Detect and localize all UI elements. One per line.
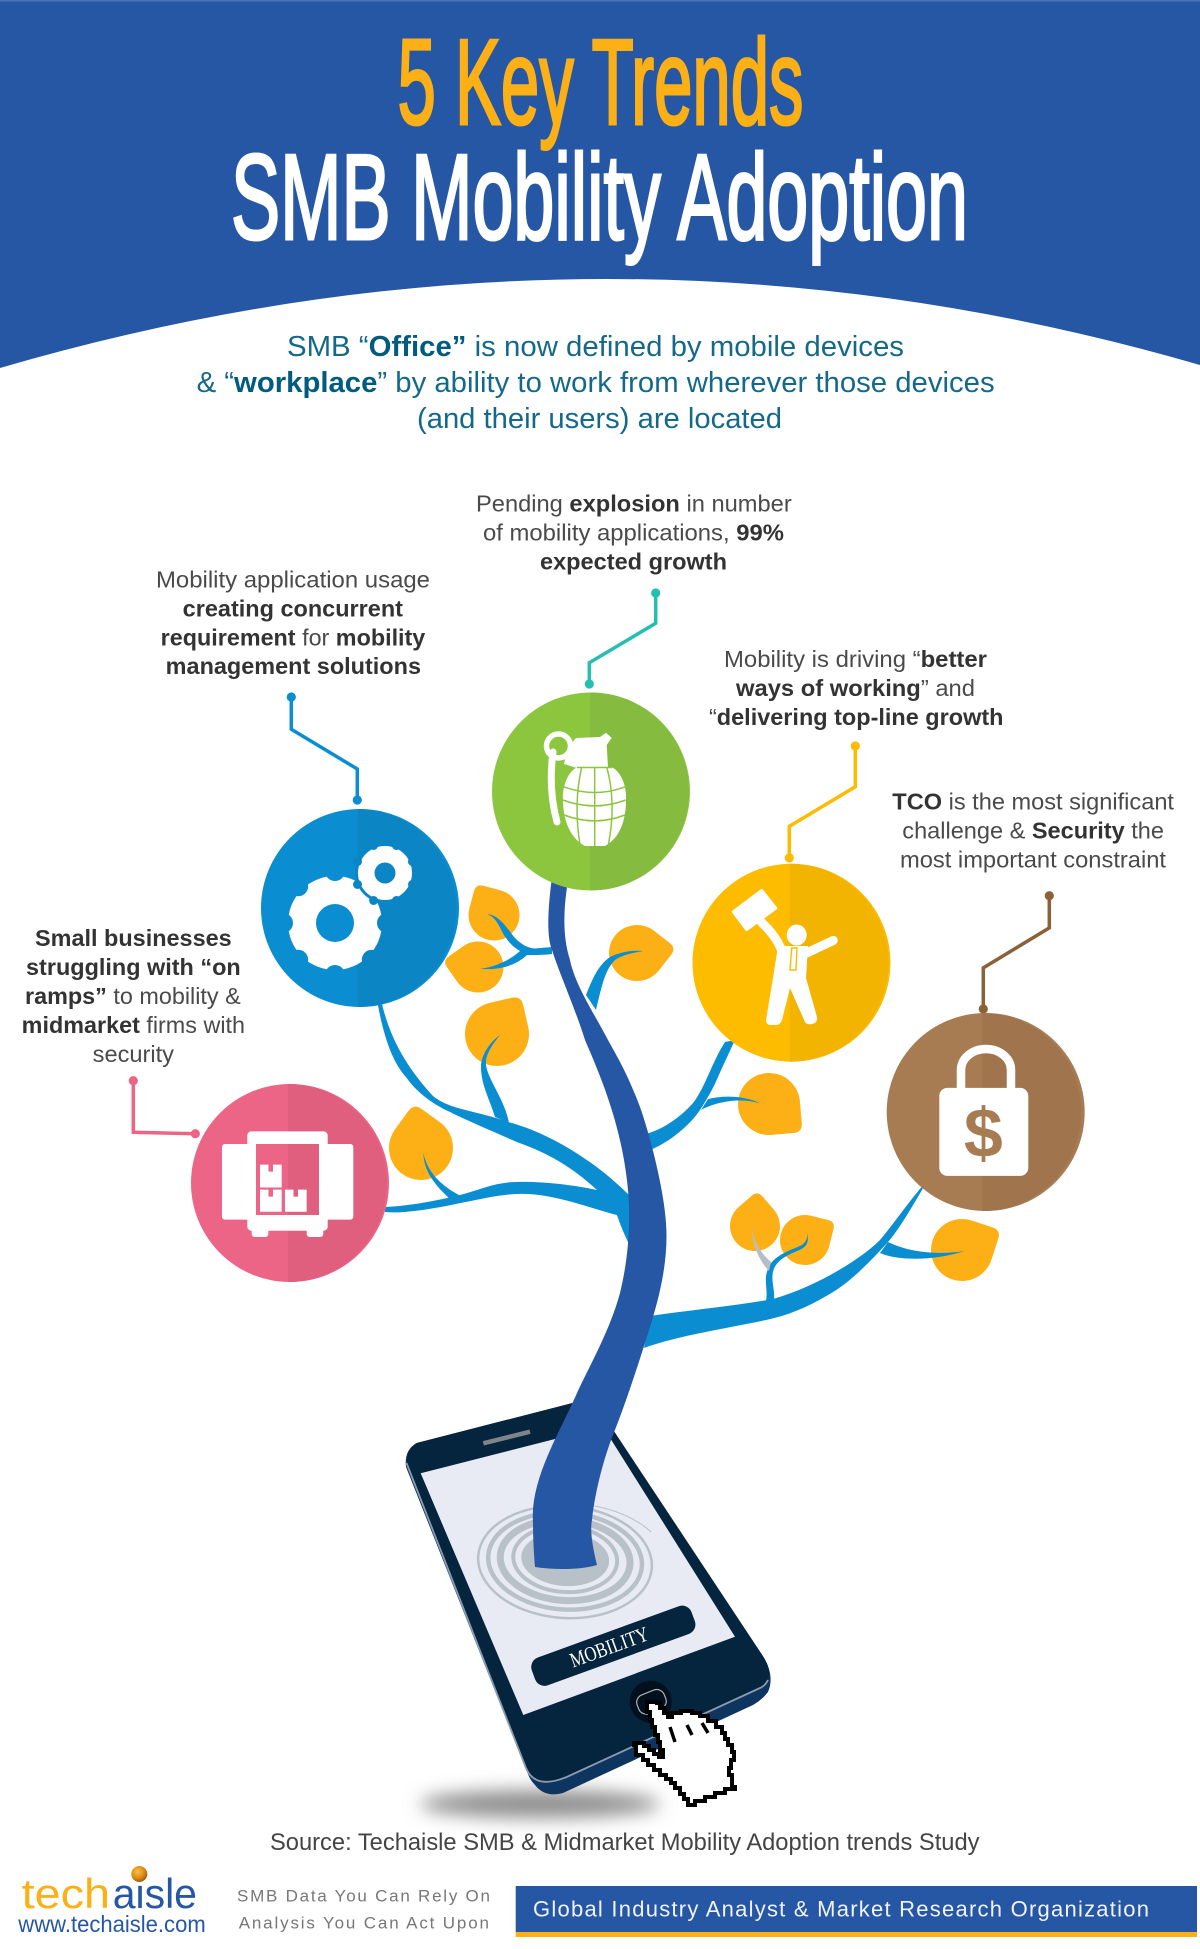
home button bbox=[630, 1681, 672, 1723]
logo: aisle bbox=[113, 1870, 197, 1917]
callout: small businesses: ramps” to mobility & bbox=[25, 983, 241, 1009]
phone bbox=[406, 1398, 771, 1794]
tagline bbox=[237, 1887, 490, 1932]
callout: application explosion bbox=[476, 491, 792, 574]
logo: www.techaisle.com bbox=[17, 1911, 206, 1937]
logo bbox=[17, 1866, 206, 1937]
source line: Source: Techaisle SMB & Midmarket Mobility Adoption trends Study bbox=[270, 1829, 980, 1856]
tagline: Analysis You Can Act Upon bbox=[239, 1913, 489, 1932]
subheading: & “workplace” by ability to work from wherever those devices bbox=[197, 367, 995, 399]
icon: businessman with briefcase bbox=[733, 890, 833, 1025]
callout: application explosion: expected growth bbox=[540, 548, 727, 574]
grey twig bbox=[752, 1228, 771, 1271]
icon: padlock bbox=[939, 1049, 1028, 1176]
tagline: SMB Data You Can Rely On bbox=[237, 1887, 490, 1906]
connector: brown bbox=[979, 891, 1054, 1014]
callout: management solutions: management solutions bbox=[166, 653, 421, 679]
footer bar bbox=[516, 1886, 1197, 1937]
footer bar: Global Industry Analyst & Market Research Organization bbox=[533, 1897, 1149, 1922]
callout: small businesses: Small businesses bbox=[35, 925, 232, 951]
right branches bbox=[645, 1040, 735, 1150]
icon: small gear bbox=[353, 841, 417, 905]
callout: application explosion: of mobility applications, 99% bbox=[483, 520, 784, 546]
connector: pink bbox=[129, 1076, 200, 1138]
circle: grenade icon bbox=[492, 692, 690, 890]
circle: businessman icon bbox=[692, 864, 890, 1062]
subheading bbox=[197, 331, 995, 435]
header banner bbox=[0, 0, 1200, 368]
phone shadow bbox=[420, 1790, 660, 1818]
mobility button bbox=[528, 1603, 698, 1689]
cursor hand bbox=[634, 1702, 735, 1805]
circle: storage icon bbox=[191, 1084, 389, 1282]
icon: large gear bbox=[273, 861, 397, 985]
mobility button: MOBILITY bbox=[567, 1622, 652, 1672]
left branches bbox=[377, 1000, 640, 1250]
callout: better ways of working bbox=[709, 646, 1004, 730]
icon: grenade bbox=[546, 733, 626, 846]
callout: TCO and security: TCO is the most significant bbox=[892, 788, 1175, 814]
callout: small businesses bbox=[22, 925, 245, 1067]
callout: TCO and security: most important constraint bbox=[900, 846, 1167, 872]
icon: storage cabinet bbox=[222, 1131, 353, 1237]
title bbox=[231, 14, 968, 265]
callout: management solutions: creating concurrent bbox=[183, 596, 403, 622]
callout: management solutions: requirement for mobility bbox=[161, 624, 426, 650]
callout: better ways of working: “delivering top-line growth bbox=[709, 704, 1004, 730]
callout: small businesses: struggling with “on bbox=[26, 954, 241, 980]
logo: tech bbox=[22, 1870, 110, 1917]
callout: TCO and security: challenge & Security the bbox=[902, 817, 1164, 843]
ripples bbox=[474, 1498, 656, 1624]
callout: better ways of working: ways of working ” and bbox=[735, 675, 975, 701]
callout: better ways of working: Mobility is driving “ better bbox=[724, 646, 987, 672]
phone screen bbox=[421, 1427, 735, 1715]
title line 1: 5 Key Trends bbox=[398, 14, 804, 150]
circle: lock icon bbox=[887, 1013, 1085, 1211]
callout: small businesses: security bbox=[93, 1041, 175, 1067]
leaves bbox=[376, 884, 1001, 1289]
connector: teal bbox=[585, 588, 660, 689]
callout: small businesses: midmarket firms with bbox=[22, 1012, 245, 1038]
subheading: (and their users) are located bbox=[417, 403, 782, 435]
subheading: SMB “Office” is now defined by mobile devices bbox=[287, 331, 904, 363]
phone side bbox=[406, 1398, 771, 1794]
phone front bbox=[407, 1398, 769, 1782]
connector: yellow bbox=[785, 741, 860, 863]
callout: management solutions bbox=[156, 567, 430, 679]
callout: TCO and security bbox=[892, 788, 1175, 872]
circle: gears icon bbox=[261, 809, 459, 1007]
connector: blue bbox=[287, 692, 362, 805]
tree trunk bbox=[533, 870, 666, 1569]
callout: management solutions: Mobility application usage bbox=[156, 567, 430, 593]
tree branches bbox=[377, 914, 965, 1348]
icon: padlock: $ bbox=[964, 1094, 1003, 1172]
callout: application explosion: Pending explosion in number bbox=[476, 491, 792, 517]
phone speaker bbox=[483, 1432, 530, 1443]
